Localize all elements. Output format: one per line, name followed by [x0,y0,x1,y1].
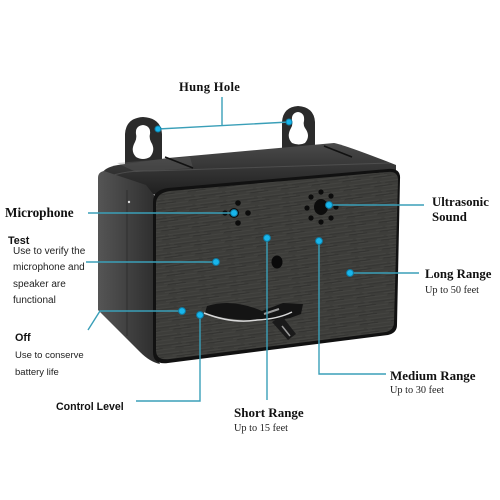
label: short range: Up to 15 feet [234,423,288,434]
label: off: battery life [15,367,59,378]
indicator light [272,256,282,268]
label: test: speaker are [13,279,66,290]
label: long range: Up to 50 feet [425,285,479,296]
box front panel [153,169,400,363]
label: short range: Short Range [234,405,304,420]
label: long range [425,267,492,296]
microphone holes [222,200,251,226]
label: control level: Control Level [56,401,124,413]
label: off: Use to conserve [15,350,84,361]
label: off [15,332,84,378]
mounting tab: right [282,106,315,152]
leader: long range [347,270,419,276]
switch slot and handle [204,303,303,340]
label: ultrasonic sound: Ultrasonic [432,195,489,209]
label: medium range [390,368,476,396]
label: hung hole: Hung Hole [179,80,240,94]
label: medium range: Medium Range [390,368,476,383]
label: test: functional [13,295,56,306]
label: test [8,235,86,306]
label: microphone: Microphone [5,205,74,220]
box top [100,143,396,196]
label: ultrasonic sound [432,195,489,224]
label: test: microphone and [13,262,85,273]
leader: control level [136,312,203,401]
label: medium range: Up to 30 feet [390,385,444,396]
box side [98,171,160,364]
label: long range: Long Range [425,267,492,281]
leader: test [86,259,219,265]
label: off: Off [15,332,31,344]
leader: microphone [88,210,237,216]
product: ultrasonic device [98,106,400,364]
label: short range [234,405,304,434]
leader: ultrasonic sound [326,202,424,208]
label: ultrasonic sound: Sound [432,210,467,224]
leader: hung hole [155,97,292,132]
leader: medium range [316,238,386,374]
speaker holes [304,189,339,225]
label: test: Test [8,235,30,247]
leader: short range [264,235,270,400]
label: test: Use to verify the [13,246,86,257]
mounting tab: left [125,117,162,172]
leader: off [88,308,185,330]
